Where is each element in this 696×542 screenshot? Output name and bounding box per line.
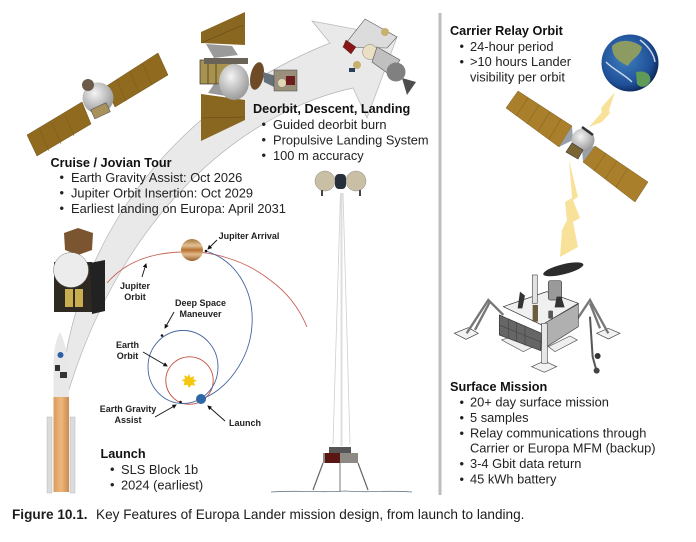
icon: surface lander — [454, 259, 620, 374]
arrows: callouts — [142, 240, 225, 421]
text: carrier relay orbit — [450, 24, 572, 84]
icon: cruise spacecraft — [27, 53, 168, 156]
icon: relay spacecraft — [506, 91, 648, 202]
label: jupiter arrival: Jupiter Arrival — [219, 231, 279, 241]
text: surface mission: Relay communications through — [470, 426, 646, 440]
text: carrier relay orbit: visibility per orbit — [470, 70, 565, 84]
caption: Key Features of Europa Lander mission design, from launch to landing. — [96, 507, 524, 522]
chart: trajectory diagram — [100, 231, 307, 428]
mission arrow — [62, 21, 397, 393]
text: cruise / jovian tour — [50, 156, 286, 216]
text: deorbit, descent, landing: • — [262, 132, 266, 147]
label: jupiter orbit: Jupiter — [120, 281, 150, 291]
icon: rocket — [47, 332, 75, 493]
text: cruise / jovian tour: Earliest landing on Europa: April 2031 — [71, 201, 286, 216]
text: surface mission: 5 samples — [470, 410, 529, 425]
label: launch: Launch — [229, 418, 261, 428]
label: jupiter orbit: Orbit — [124, 292, 146, 302]
text: surface mission — [450, 380, 656, 486]
icon: spacecraft with carrier and lander — [200, 12, 297, 141]
icon: deorbit vehicle — [343, 19, 416, 95]
text: carrier relay orbit: • — [460, 38, 464, 54]
text: surface mission: 45 kWh battery — [470, 472, 557, 486]
text: surface mission: • — [460, 456, 464, 471]
text: launch: • — [110, 462, 114, 476]
label: deep space maneuver: Maneuver — [179, 309, 222, 319]
text: surface mission: 3-4 Gbit data return — [470, 456, 581, 471]
icon: signal bolt to earth — [589, 92, 615, 127]
text: deorbit, descent, landing: • — [262, 148, 266, 162]
text: surface mission: 20+ day surface mission — [470, 394, 609, 410]
text: launch: Launch — [100, 447, 146, 461]
label: earth orbit: Earth — [116, 340, 139, 350]
text: cruise / jovian tour: Jupiter Orbit Insertion: Oct 2029 — [71, 186, 253, 200]
label: deep space maneuver: Deep Space — [175, 298, 226, 308]
text: cruise / jovian tour: Earth Gravity Assist: Oct 2026 — [71, 170, 242, 185]
icon: signal bolt to lander — [560, 160, 580, 257]
text: launch: 2024 (earliest) — [121, 478, 203, 492]
text: cruise / jovian tour: • — [60, 200, 64, 216]
text: deorbit, descent, landing — [253, 102, 429, 163]
text: surface mission: • — [460, 394, 464, 410]
icon: jupiter — [181, 239, 203, 261]
text: deorbit, descent, landing: 100 m accuracy — [273, 148, 364, 163]
text: deorbit, descent, landing: • — [262, 116, 266, 132]
label: earth orbit: Orbit — [117, 351, 138, 361]
text: cruise / jovian tour: • — [60, 170, 64, 184]
label: earth gravity assist: Assist — [114, 415, 142, 425]
text: surface mission: • — [460, 410, 464, 425]
icon: sky crane — [315, 171, 366, 446]
icon: cruise stack — [54, 228, 105, 314]
text: deorbit, descent, landing: Propulsive Landing System — [273, 132, 429, 148]
text: deorbit, descent, landing: Deorbit, Descent, Landing — [253, 102, 410, 116]
text: deorbit, descent, landing: Guided deorbit burn — [273, 117, 387, 132]
text: carrier relay orbit: >10 hours Lander — [470, 54, 572, 69]
divider — [438, 13, 442, 495]
text: carrier relay orbit: Carrier Relay Orbit — [450, 24, 564, 38]
text: cruise / jovian tour: Cruise / Jovian Tour — [50, 156, 172, 170]
text: launch: SLS Block 1b — [121, 462, 198, 477]
text: cruise / jovian tour: • — [60, 185, 64, 200]
text: surface mission: Carrier or Europa MFM (backup) — [470, 440, 656, 456]
icon: sun — [181, 374, 197, 388]
text: carrier relay orbit: 24-hour period — [470, 39, 554, 54]
label: earth gravity assist: Earth Gravity — [100, 404, 156, 414]
text: launch: • — [110, 477, 114, 492]
text: surface mission: Surface Mission — [450, 380, 547, 394]
icon: earth small — [196, 394, 206, 404]
text: launch — [100, 447, 203, 492]
text: surface mission: • — [460, 426, 464, 440]
caption: Figure 10.1. — [12, 507, 88, 522]
text: surface mission: • — [460, 472, 464, 486]
icon: earth — [602, 34, 658, 92]
icon: landing stage — [271, 447, 412, 492]
text: carrier relay orbit: • — [460, 54, 464, 69]
